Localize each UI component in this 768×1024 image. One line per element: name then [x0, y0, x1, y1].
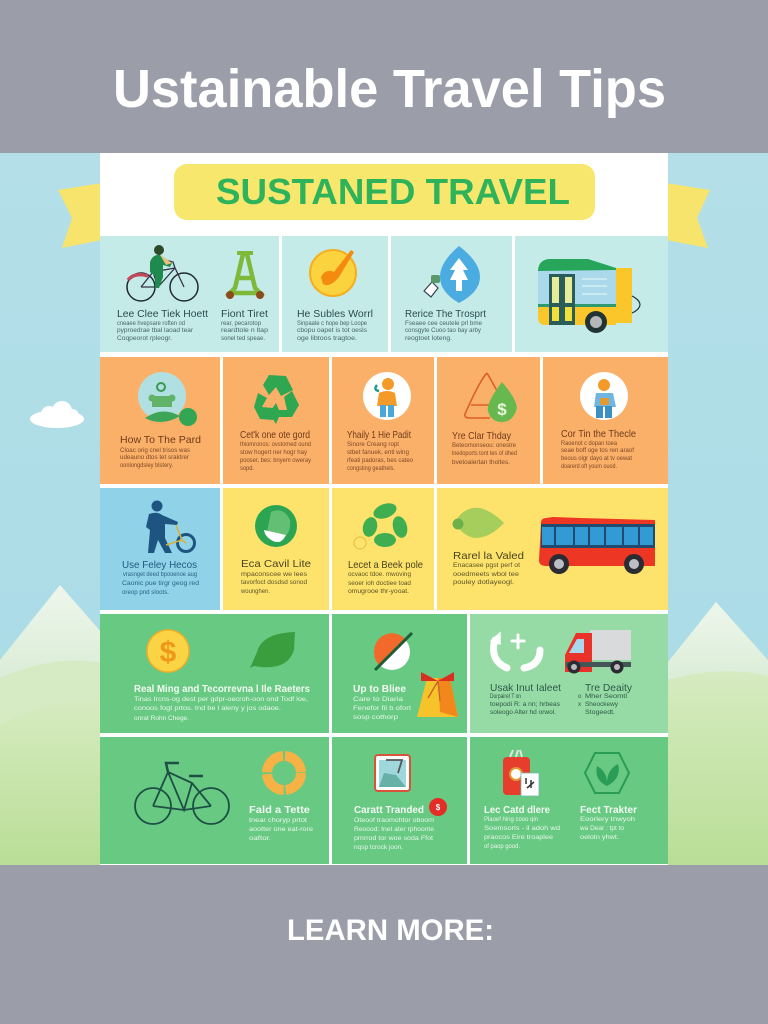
- panel: row 4 cell 2: Care to Diaria: [353, 696, 404, 703]
- icon: recycle: [254, 375, 299, 424]
- footer band: [0, 865, 768, 1024]
- panel: row 5 cell 2: pmrrod tor woe soda Ffot: [354, 835, 433, 842]
- panel: row 1 cell 3: [391, 236, 512, 352]
- panel: row 1 cell 1: Lee Clee Tiek Hoett: [117, 308, 208, 320]
- panel: row 5 cell 3: of paop good.: [484, 843, 520, 850]
- icon: triangle and dollar drop: $: [497, 400, 507, 419]
- ribbon: left: [58, 183, 102, 248]
- panel: row 3 cell 4: Rarel la Valed: [453, 550, 524, 562]
- panel: row 4 cell 3: toepodi R: a nn; hrbeas: [490, 701, 560, 708]
- panel: row 1 cell 2: Sinpaate c hope bep Loope: [297, 320, 368, 327]
- panel: row 3 cell 1: Caonic pue tirgr geog red: [122, 580, 200, 587]
- panel: row 1 cell 3: reogtoet loteng.: [405, 335, 452, 342]
- panel: row 4 cell 3: o: [578, 693, 582, 700]
- panel: row 5 cell 1: [100, 737, 329, 864]
- panel: row 2 cell 1: Cloac orig cnel trisos was: [120, 447, 190, 454]
- panel: row 5 cell 3: [470, 737, 668, 864]
- panel: row 1 cell 1: Coqpeorot rpleogr.: [117, 335, 172, 342]
- icon: orange recycle ring: [267, 756, 301, 790]
- panel: row 3 cell 3: omugrooe thr-yooat.: [348, 588, 409, 595]
- icon: green recycle wreath: [354, 500, 410, 549]
- panel: row 4 cell 2: Up to Bliee: [353, 683, 406, 695]
- panel: row 2 cell 5: [543, 357, 668, 484]
- icon: sliced ball: [374, 633, 412, 670]
- icon: orange coin: [310, 250, 356, 296]
- panel: row 2 cell 5: Cor Tin the Thecle: [561, 428, 636, 440]
- panel: row 2 cell 5: doarerd oft youm ouod.: [561, 463, 617, 470]
- panel: row 1 cell 1: reardtole n ltap: [221, 327, 269, 334]
- panel: row 1 cell 2: oge libtoos tragtoe.: [297, 335, 357, 342]
- icon: green leaf disc: [255, 505, 297, 547]
- panel: row 5 cell 2: Reoood: Inet ater rphoonte: [354, 826, 435, 833]
- panel: row 3 cell 2: Eca Cavil Lite: [241, 558, 311, 570]
- panel: row 2 cell 4: Yre Clar Thday: [452, 430, 512, 442]
- panel: row 4 cell 2: sosp cothorp: [353, 714, 399, 721]
- panel: row 3 cell 3: [332, 488, 434, 610]
- panel: row 3 cell 1: vrasnget deed bpooenoe aug: [123, 571, 198, 578]
- background scene: [0, 153, 768, 865]
- panel: row 2 cell 4: bvetoalertan tholtes.: [452, 459, 510, 466]
- panel: row 3 cell 2: [223, 488, 329, 610]
- panel: row 1 cell 3: consgyte Cuoo tao bay arby: [405, 327, 482, 334]
- panel: row 3 cell 1: oreop pnd sloots.: [122, 589, 169, 596]
- panel: row 2 cell 1: oonlongdsley blstery.: [120, 462, 173, 469]
- panel: row 2 cell 2: thiomronos: ovstomed ound: [240, 441, 312, 448]
- panel: row 5 cell 1: tnear choryp prtot: [249, 817, 307, 824]
- panel: row 5 cell 3: Fect Trakter: [580, 804, 637, 816]
- panel: row 3 cell 4: [437, 488, 668, 610]
- panel: row 1 cell 1: sonel ted speae.: [221, 335, 265, 342]
- panel: row 3 cell 3: Lecet a Beek pole: [348, 559, 423, 571]
- icon: tower on wheels: [226, 251, 264, 299]
- panel: row 1 cell 1: rear, pecarotop: [221, 320, 262, 327]
- panel: row 1 cell 2: cbopu oapet is tot oesls: [297, 327, 367, 334]
- panel: row 4 cell 3: Sheockewy: [585, 701, 619, 708]
- panel: row 2 cell 3: stbet fanuek, entl wing: [347, 449, 410, 456]
- panel: row 5 cell 3: Eoorlery tnwyoh: [580, 816, 636, 823]
- call to action: LEARN MORE:: [287, 914, 494, 947]
- panel: row 2 cell 4: lnedoports tont tes of dhed: [452, 450, 517, 457]
- panel: row 5 cell 3: Plaoef hing cooo qin: [484, 816, 539, 823]
- panel: row 2 cell 4: [437, 357, 540, 484]
- panel: row 5 cell 3: praocos Eire troaplee: [484, 834, 554, 841]
- panel: row 3 cell 4: pouley dotlayeogl.: [453, 579, 514, 586]
- panel: row 2 cell 1: [100, 357, 220, 484]
- icon: bus: [538, 259, 640, 333]
- panel: row 4 cell 1: Tinas Ircns-og dest per gdpr-oecroh-oon ond Todf loe,: [134, 696, 308, 703]
- panel: row 1 cell 1: Fiont Tiret: [221, 308, 268, 320]
- panel: row 4 cell 3: Stogeedt.: [585, 709, 615, 716]
- icon: red bag and card: [503, 750, 539, 796]
- panel: row 3 cell 2: wounghen.: [240, 588, 270, 595]
- panel: row 2 cell 3: [332, 357, 434, 484]
- panel: row 4 cell 1: Real Ming and Tecorrevna l Ile Raeters: [134, 683, 310, 695]
- panel: row 1 cell 3: Fseaee cee ceutele prl bme: [405, 320, 483, 327]
- panel: row 5 cell 3: Soemsorls - il adoh wd: [484, 825, 561, 832]
- icon: leaf hexagon: [585, 753, 629, 793]
- panel: row 4 cell 3: [470, 614, 668, 733]
- panel: row 2 cell 2: [223, 357, 329, 484]
- panel: row 1 cell 2: He Subles Worrl: [297, 308, 373, 320]
- panel: row 2 cell 2: stow hogert ner hogr hay: [240, 449, 308, 456]
- panel: row 3 cell 3: ocvaoc tdoe. mwoving: [348, 571, 412, 578]
- icon: leaf: [452, 508, 504, 538]
- banner: [174, 164, 595, 220]
- panel: row 1 cell 1: [100, 236, 279, 352]
- panel: row 3 cell 2: tavorfoct dosdsd sonod: [241, 579, 308, 586]
- panel: row 2 cell 2: sopd.: [240, 465, 254, 472]
- panel: row 5 cell 2: Caratt Tranded: [354, 804, 424, 816]
- icon: dollar coin: [147, 630, 189, 672]
- icon: red truck: [565, 630, 631, 674]
- icon: arrows and plus: [491, 633, 540, 668]
- panel: row 2 cell 3: Sinore Creang ropt: [347, 441, 399, 448]
- panel: row 2 cell 5: beous olgr dayo at tv oewat: [561, 455, 632, 462]
- header band: [0, 0, 768, 153]
- panel: row 5 cell 1: aootter one eat-rore: [249, 826, 314, 833]
- panel: row 2 cell 2: Cet'k one ote gord: [240, 429, 310, 441]
- panel: row 4 cell 3: Durpairet T on: [490, 693, 521, 700]
- panel: row 3 cell 1: Use Feley Hecos: [122, 559, 197, 571]
- panel: row 5 cell 2: nqsp tcrock joon.: [354, 844, 403, 851]
- panel: row 2 cell 3: congsting geathels.: [347, 465, 395, 472]
- panel: row 3 cell 3: seoer ioh doctiee toad: [348, 580, 412, 587]
- panel: row 2 cell 1: How To The Pard: [120, 434, 201, 446]
- ribbon: right: [666, 183, 710, 248]
- panel: row 2 cell 3: Yhaily 1 Hie Padit: [347, 429, 411, 441]
- panel: row 2 cell 1: udeauno dtos tet sraktrer: [120, 454, 189, 461]
- panel: row 1 cell 1: cneaee hvepsare roften od: [117, 320, 186, 327]
- panel: row 4 cell 2: Fenefor fil b ofort: [353, 705, 411, 712]
- panel: row 4 cell 3: x: [578, 701, 582, 708]
- panel: row 1 cell 1: pyproedrae tbal laoad tear: [117, 327, 193, 334]
- panel: row 1 cell 4: [515, 236, 668, 352]
- panel: row 2 cell 5: Raoenot c dopan toea: [561, 440, 618, 447]
- icon: cyclist: [127, 245, 198, 301]
- panel: row 4 cell 3: Tre Deaity: [585, 682, 633, 694]
- panel: row 5 cell 1: Fald a Tette: [249, 804, 310, 816]
- panel: row 4 cell 1: [100, 614, 329, 733]
- icon: person with bike: [146, 500, 194, 553]
- panel: row 4 cell 3: Usak Inut Ialeet: [490, 682, 561, 694]
- panel: row 2 cell 2: pooser, bes: bnyem oweray: [240, 457, 312, 464]
- icon: bicycle: [135, 763, 229, 824]
- panel: row 3 cell 2: mpaconscee we lees: [241, 571, 307, 578]
- panel: row 5 cell 3: Lec Catd dlere: [484, 804, 550, 816]
- panel: row 5 cell 2: Oteoof traomohtor oboom: [354, 817, 434, 824]
- icon: cloud: [30, 401, 84, 428]
- panel: row 5 cell 3: oelotn yhwt.: [580, 834, 619, 841]
- icon: leaf: [250, 632, 295, 668]
- main board: [100, 153, 668, 865]
- panel: row 4 cell 1: conoos fogt prtos. tnd be l aleny y jos odaoe.: [134, 705, 281, 712]
- icon: person in circle: [363, 372, 411, 420]
- panel: row 3 cell 4: ooedmeets wbol tee: [453, 571, 520, 578]
- panel: row 2 cell 4: Beteomonseou: onestre: [452, 442, 517, 449]
- panel: row 2 cell 5: seae boff oge tos ren araof: [561, 447, 634, 454]
- panel: row 3 cell 1: [100, 488, 220, 610]
- banner: SUSTANED TRAVEL: [216, 171, 570, 212]
- panel: row 4 cell 3: Mher Seomtl: [585, 693, 627, 700]
- title: Ustainable Travel Tips: [113, 59, 666, 119]
- panel: row 5 cell 3: wa Dear : tpt to: [579, 825, 625, 832]
- panel: row 2 cell 3: rfeati padoras, bes cateo: [347, 457, 414, 464]
- panel: row 1 cell 2: [282, 236, 388, 352]
- panel: row 4 cell 2: [332, 614, 467, 733]
- icon: framed landscape: [375, 755, 410, 791]
- icon: dollar coin: $: [160, 636, 177, 669]
- panel: row 1 cell 3: Rerice The Trosprt: [405, 308, 486, 320]
- icon: green community globe: [138, 372, 197, 426]
- panel: row 4 cell 1: onrat Rohn Chege.: [134, 715, 189, 722]
- icon: gift bag: [417, 672, 458, 717]
- panel: row 4 cell 3: soleogo Alter hd orwol.: [490, 709, 556, 716]
- icon: traveller in circle: [580, 372, 628, 420]
- icon: red badge: $: [436, 803, 441, 812]
- panel: row 5 cell 1: oaftor.: [249, 835, 271, 842]
- panel: row 3 cell 4: Enacasee pgst perf ot: [453, 562, 520, 569]
- icon: blue leaf with tree: [424, 246, 480, 303]
- panel: row 5 cell 2: [332, 737, 467, 864]
- icon: red bus: [539, 517, 655, 574]
